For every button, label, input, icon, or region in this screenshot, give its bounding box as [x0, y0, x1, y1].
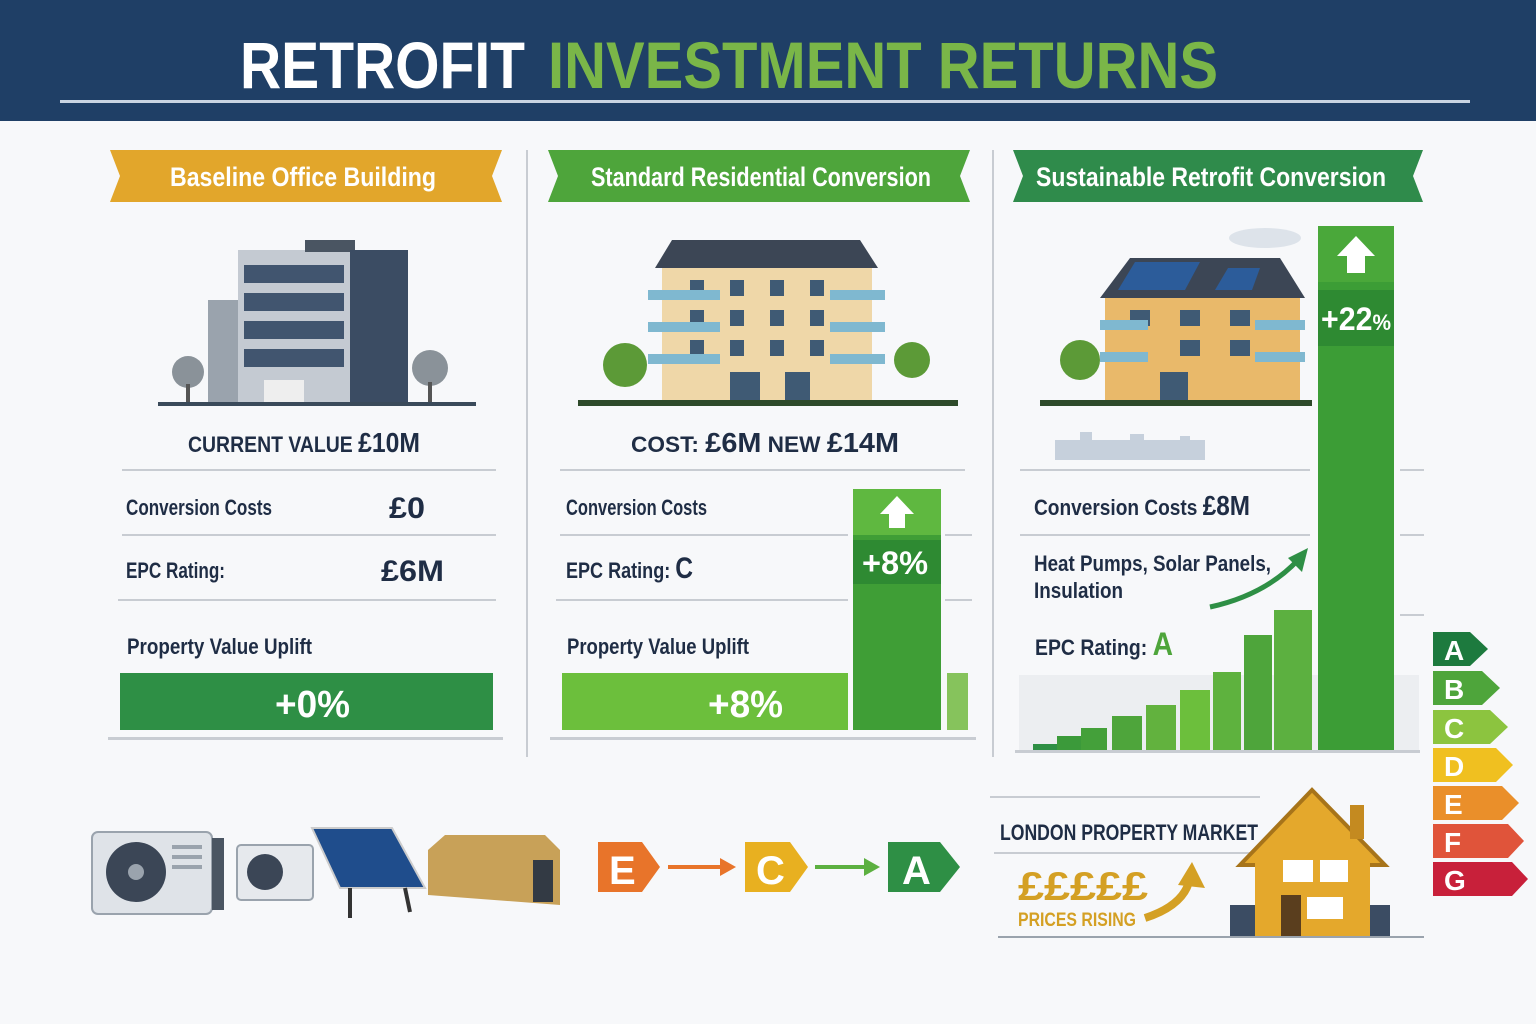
EPC scale: G — [1444, 865, 1466, 896]
title — [240, 28, 1218, 102]
EPC progression E to C to A: E — [609, 849, 636, 893]
EPC scale: A — [1444, 635, 1464, 666]
text: heat pumps: Insulation — [1034, 578, 1123, 603]
row: EPC rating — [126, 555, 444, 588]
EPC progression E to C to A — [598, 842, 960, 893]
text: cost and new value: COST: £6M NEW £14M — [631, 427, 899, 458]
text: property value uplift: Property Value Uplift — [127, 634, 313, 659]
ribbon: standard — [548, 150, 970, 202]
icons: retrofit equipment — [92, 828, 560, 918]
header band — [0, 0, 1536, 121]
row: conversion costs: £0 — [389, 492, 425, 525]
ribbon: standard: Standard Residential Conversion — [591, 162, 931, 192]
row: EPC rating C: EPC Rating: C — [566, 552, 693, 585]
bar: +8% — [562, 673, 848, 730]
text: heat pumps: Heat Pumps, Solar Panels, — [1034, 551, 1271, 576]
icon: apartment building — [578, 240, 958, 406]
ribbon: baseline — [110, 150, 502, 202]
bar: +0%: +0% — [275, 684, 350, 726]
EPC scale: C — [1444, 713, 1464, 744]
tall bar: +8% with arrow — [853, 489, 941, 730]
tall bar: +8% with arrow: +8% — [862, 545, 928, 581]
EPC scale: D — [1444, 751, 1464, 782]
row: conversion costs: Conversion Costs — [566, 495, 707, 520]
ribbon: sustainable: Sustainable Retrofit Conversion — [1036, 162, 1386, 192]
text: current value: CURRENT VALUE £10M — [188, 427, 420, 458]
callout: London property market: LONDON PROPERTY MARKET — [1000, 820, 1258, 845]
text: heat pumps — [1034, 551, 1271, 603]
EPC scale: E — [1444, 789, 1463, 820]
icon: eco house with solar — [1040, 228, 1312, 460]
bar: +0% — [120, 673, 493, 730]
tall bar: +22% — [1318, 226, 1394, 750]
EPC progression E to C to A: A — [902, 849, 931, 893]
text: EPC rating A: EPC Rating: A — [1035, 626, 1173, 662]
title: RETROFIT — [240, 28, 525, 102]
callout: London property market — [990, 796, 1424, 938]
chart: growth bars — [1015, 610, 1420, 753]
EPC scale: B — [1444, 674, 1464, 705]
row: EPC rating: £6M — [381, 555, 444, 588]
panel: baseline office — [108, 150, 503, 740]
callout: London property market: PRICES RISING — [1018, 910, 1136, 931]
row: conversion costs £8M: Conversion Costs £8M — [1034, 490, 1250, 521]
EPC scale — [1433, 632, 1528, 896]
tall bar: +22%: +22% — [1321, 301, 1391, 337]
panel: standard residential — [548, 150, 976, 740]
EPC progression E to C to A: C — [756, 849, 785, 893]
icon: office building — [158, 240, 476, 406]
row: conversion costs: Conversion Costs — [126, 495, 272, 520]
row: conversion costs — [126, 492, 425, 525]
row: EPC rating: EPC Rating: — [126, 558, 225, 583]
text: property value uplift: Property Value Uplift — [567, 634, 750, 659]
icon: golden house — [1230, 790, 1390, 936]
title: INVESTMENT RETURNS — [548, 28, 1218, 102]
panel: sustainable retrofit — [1013, 150, 1424, 753]
arrow: curved green — [1210, 548, 1308, 607]
callout: London property market: £££££ — [1018, 865, 1148, 909]
ribbon: sustainable — [1013, 150, 1423, 202]
bar: +8%: +8% — [708, 684, 783, 726]
EPC scale: F — [1444, 827, 1461, 858]
ribbon: baseline: Baseline Office Building — [170, 162, 436, 192]
